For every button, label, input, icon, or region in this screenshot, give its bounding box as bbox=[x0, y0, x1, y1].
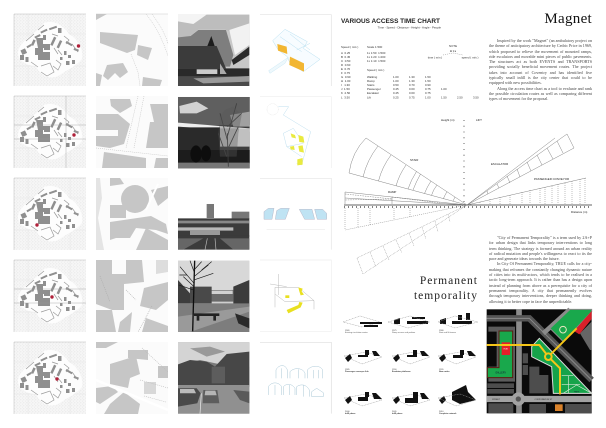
massing row 3: Infill phase bbox=[392, 413, 403, 415]
massing row 1: 1969 bbox=[345, 330, 350, 332]
site plan 2 bbox=[14, 96, 86, 168]
stair fan bbox=[349, 138, 467, 205]
small massing diagrams bbox=[343, 313, 478, 415]
escalator fan bbox=[467, 134, 574, 205]
massing row 3: 2000 bbox=[345, 411, 350, 413]
massing row 2: 1995 bbox=[439, 369, 444, 371]
enlarged plan 1 bbox=[96, 14, 168, 86]
massing row 1: Existing circulation routes bbox=[345, 331, 368, 334]
photo 4: square with bare tree and bench bbox=[178, 261, 249, 332]
map: orange marker bbox=[555, 404, 563, 411]
data tables: J 1.50 bbox=[341, 87, 350, 91]
map: street labels: STREET bbox=[492, 399, 501, 401]
height axis bbox=[463, 120, 465, 203]
massing row 3: Complete network bbox=[439, 412, 457, 415]
data tables: 1x 1:10 1:500 bbox=[367, 59, 386, 63]
data tables: 1.00 bbox=[393, 79, 399, 83]
massing row 3: Infill phase bbox=[345, 413, 356, 415]
chart labels: STAIR bbox=[410, 158, 418, 162]
distance axis bbox=[344, 204, 592, 206]
data tables: 0.45 bbox=[393, 91, 399, 95]
map: left green block with red marker: GALLERY bbox=[495, 371, 506, 374]
chart labels bbox=[388, 118, 587, 214]
map: yellow route bbox=[487, 328, 577, 394]
data tables: 0.60 bbox=[409, 91, 415, 95]
data tables: 1x 1:20 1:200 bbox=[367, 55, 386, 59]
chart title: VARIOUS ACCESS TIME CHART bbox=[341, 18, 440, 25]
diagram 2: yellow-green stepped volumes bbox=[260, 97, 331, 168]
massing row 2: 1985 bbox=[345, 369, 350, 371]
data tables: 1x 1:50 1:500 bbox=[367, 51, 386, 55]
massing row 2: Passenger conveyor link bbox=[345, 371, 369, 373]
massing row 1 bbox=[343, 313, 478, 334]
data tables: Speed ( m/s ) bbox=[341, 45, 358, 49]
text block: Permanent temporality description: In City Of Permanent Temporality, TRUE calls for a city-making that reframes the constantly changing dynamic nature of cities into its multi-actors, which tends to be realised in a tactic long-term approach. It is rather than has a design upon instead of planning from above as a prerequisite for a city of permanent temporality. A city that permanently evolves through temporary interventions, deeper thinking and doing, allowing it to better cope in face the unpredictable. bbox=[489, 261, 592, 304]
massing row 3 bbox=[344, 385, 476, 415]
formula note: time ( min ) bbox=[428, 56, 442, 60]
diagram 5: outlined house rows bbox=[260, 342, 331, 414]
chart labels: LIFT bbox=[476, 118, 482, 122]
map: street labels: CORPORATION ST bbox=[534, 398, 553, 401]
passenger conveyor fan bbox=[467, 178, 586, 205]
heading: Magnet: Magnet bbox=[544, 11, 592, 27]
data tables: 0.75 bbox=[409, 96, 415, 100]
site plan 4 bbox=[14, 260, 86, 332]
text block: Permanent temporality description: "City of Permanent Temporality" is a term used by 2A+P for urban design that links temporary interventions to long term thinking. The strategy is formed around an urban reality of radical mutation and people's willingness to react to its the pace and generate ideas towards the future. bbox=[489, 235, 592, 261]
data tables: C 0.50 bbox=[341, 59, 351, 63]
data tables: 1.00 bbox=[425, 96, 431, 100]
data tables: 2.50 bbox=[457, 96, 463, 100]
massing row 1: Ramp access and podium bbox=[392, 332, 415, 334]
data tables: E 0.70 bbox=[341, 67, 351, 71]
column: photographs bbox=[178, 15, 250, 414]
data tables: B 0.45 bbox=[341, 55, 351, 59]
data tables: Ramp bbox=[367, 79, 375, 83]
enlarged plan 5 bbox=[96, 342, 168, 414]
chart labels: Distance (m) bbox=[571, 210, 587, 214]
data tables: I 1.30 bbox=[341, 83, 350, 87]
chart labels: RAMP bbox=[388, 190, 396, 194]
data tables: G 0.90 bbox=[341, 75, 351, 79]
photo 1: faceted building bbox=[178, 15, 249, 86]
massing row 3: 2005 bbox=[392, 411, 397, 413]
data tables: 0.45 bbox=[393, 87, 399, 91]
photo 3: tower over rooftops bbox=[178, 178, 249, 250]
map: upper green strip bbox=[550, 309, 592, 342]
map: left green block with red marker bbox=[487, 331, 513, 378]
data tables bbox=[341, 45, 479, 100]
lower dotted fan bbox=[357, 205, 467, 274]
site map bbox=[487, 309, 592, 413]
chart labels: ESCALATOR bbox=[491, 162, 508, 166]
data tables: 1.00 bbox=[393, 75, 399, 79]
data tables: Lift bbox=[367, 96, 371, 100]
enlarged plan 3 bbox=[96, 178, 168, 250]
data tables: A 0.25 bbox=[341, 51, 351, 55]
massing row 2: 1990 bbox=[392, 369, 397, 371]
data tables: 0.90 bbox=[425, 83, 431, 87]
data tables: 1.50 bbox=[441, 96, 447, 100]
massing row 3: 2010 bbox=[439, 411, 444, 413]
formula note: A t s bbox=[450, 49, 456, 53]
data tables: Walking bbox=[367, 75, 378, 79]
column: enlarged figure-ground plans bbox=[96, 14, 168, 414]
text block: Magnet description: Along the access time chart as a tool to evaluate and rank the possible circulation routes as well as comparing different types of movement for the proposal. bbox=[489, 86, 592, 101]
photo 2: terrace with tree bbox=[178, 97, 250, 168]
massing row 2: New nodes bbox=[439, 371, 450, 373]
data tables: 0.60 bbox=[409, 87, 415, 91]
diagram 1: yellow-highlighted block bbox=[260, 15, 331, 86]
data tables: 1.00 bbox=[441, 87, 447, 91]
massing row 1: 1975 bbox=[392, 330, 397, 332]
map: roads bbox=[487, 309, 592, 413]
ramp fan bbox=[345, 192, 467, 205]
column: site plans bbox=[14, 14, 86, 414]
chart labels: Height (m) bbox=[441, 118, 455, 122]
formula note: speed ( m/s ) bbox=[462, 56, 478, 60]
data tables: Escalator bbox=[367, 91, 379, 95]
formula note bbox=[428, 44, 478, 60]
data tables: 1.50 bbox=[425, 75, 431, 79]
data tables: Speed ( m/s ) bbox=[367, 68, 384, 72]
heading: Permanent temporality: temporality bbox=[414, 290, 478, 302]
map: green triangular park: PARK bbox=[574, 390, 580, 393]
text block: Magnet description: Inspired by the work "Magnet" (an ambulatory project on the theme of anticipatory architecture by Cedric Price in 1969, which proposed to relieve the movement of mounted ramps, ride escalators and movable mini pieces of public pavements. The structures act as both EVENTS and TRANSPORTS providing socially beneficial movement routes. The project takes into account of Coventry and has identified five typically small infill is the city center that could to be equipped with new possibilities. bbox=[489, 38, 592, 85]
chart subtitle: Time - Speed - Distance - Height - Angle - People bbox=[378, 26, 441, 30]
map: left green block with red marker: HUB bbox=[504, 348, 508, 350]
data tables: 0.25 bbox=[393, 96, 399, 100]
data tables: 0.75 bbox=[425, 91, 431, 95]
photo 5: brick buildings and parked cars bbox=[178, 342, 249, 414]
data tables: 3.50 bbox=[473, 96, 479, 100]
massing row 1: Stair and lift towers bbox=[439, 331, 456, 334]
data tables: Stairs bbox=[367, 83, 375, 87]
data tables: 1.50 bbox=[425, 79, 431, 83]
site plan 1 bbox=[14, 14, 86, 86]
massing row 2: Escalator platforms bbox=[392, 370, 412, 373]
lower left fan bbox=[345, 205, 467, 230]
column: axonometric diagrams bbox=[260, 15, 331, 414]
map: street labels bbox=[492, 398, 553, 401]
formula note: NOTE bbox=[449, 44, 457, 48]
data tables: L 3.50 bbox=[341, 96, 350, 100]
heading: Permanent temporality: Permanent bbox=[420, 275, 478, 287]
data tables: Passenger bbox=[367, 87, 381, 91]
diagram 3: blue arched pairs bbox=[260, 178, 331, 250]
data tables: 1.30 bbox=[409, 79, 415, 83]
data tables: 0.75 bbox=[425, 87, 431, 91]
enlarged plan 4 bbox=[96, 260, 168, 332]
heading: Permanent temporality bbox=[414, 275, 478, 302]
data tables: 1.30 bbox=[409, 75, 415, 79]
diagram 4: yellow path on platform bbox=[260, 260, 331, 331]
chart heading bbox=[341, 18, 441, 30]
data tables: Scale 1:500 bbox=[367, 45, 383, 49]
massing row 2 bbox=[344, 350, 476, 373]
data tables: F 0.75 bbox=[341, 71, 350, 75]
text block: Permanent temporality description bbox=[489, 235, 592, 304]
data tables: 0.50 bbox=[393, 83, 399, 87]
data tables: K 2.50 bbox=[341, 91, 351, 95]
data tables: D 0.60 bbox=[341, 63, 351, 67]
site plan 3 bbox=[14, 178, 86, 250]
massing row 1: 1980 bbox=[439, 330, 444, 332]
data tables: H 1.00 bbox=[341, 79, 351, 83]
chart labels: PASSENGER CONVEYOR bbox=[534, 177, 569, 181]
enlarged plan 2 bbox=[96, 96, 168, 168]
access time chart bbox=[344, 120, 592, 274]
data tables: 0.70 bbox=[409, 83, 415, 87]
map: buildings bbox=[487, 322, 592, 413]
site plan 5 bbox=[14, 342, 86, 414]
